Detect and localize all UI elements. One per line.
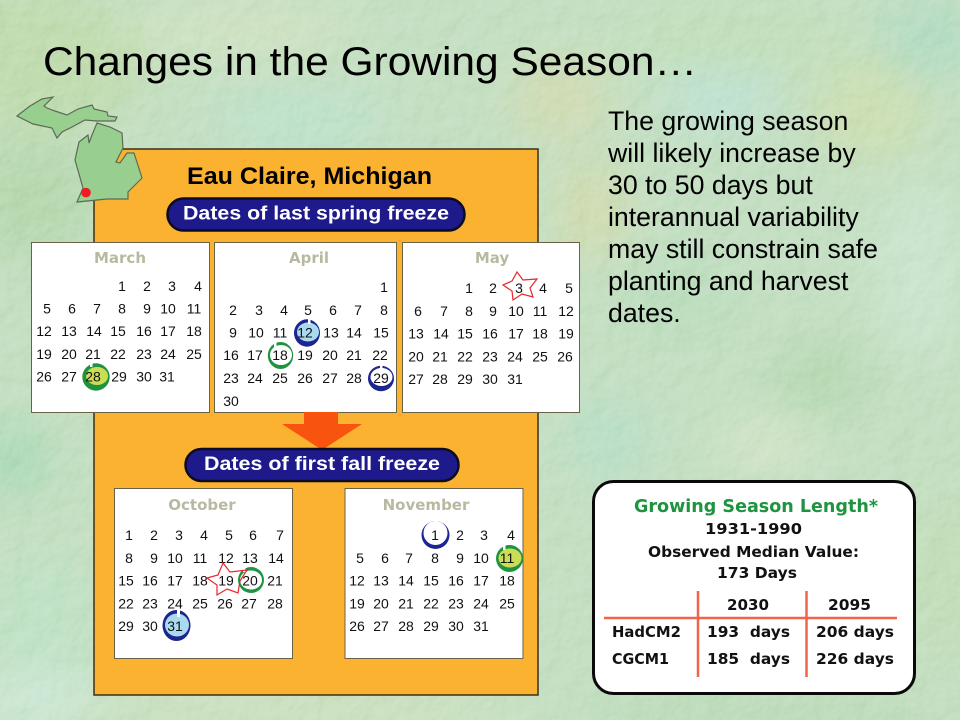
calendar: May: 24 <box>507 348 523 364</box>
calendar: November: 17 <box>473 572 489 588</box>
calendar: November: 15 <box>423 572 439 588</box>
calendar: November: 3 <box>480 527 488 543</box>
calendar: March: 12 <box>36 323 52 339</box>
calendar: November: 13 <box>373 572 389 588</box>
calendar: March: 11 <box>187 300 201 316</box>
table values: HadCM2 <box>612 623 681 641</box>
calendar: April: 28 <box>346 370 362 386</box>
text block: growing season summary: dates. <box>608 298 681 328</box>
calendar: October: 4 <box>200 527 208 543</box>
calendar: October: 12 <box>218 550 234 566</box>
calendar: October: 19 <box>218 572 234 588</box>
calendar: March: 4 <box>194 278 202 294</box>
calendar: October: 3 <box>175 527 183 543</box>
calendar: October: 18 <box>192 572 208 588</box>
calendar: October: 31 <box>167 618 183 634</box>
calendar: April: 24 <box>247 370 263 386</box>
calendar: October: 1 <box>125 527 133 543</box>
calendar: November: 16 <box>448 572 464 588</box>
text block: growing season summary: 30 to 50 days but <box>608 170 813 200</box>
calendar: October: 26 <box>217 596 233 612</box>
calendar: November: 1 <box>431 527 439 543</box>
label: dates of first fall freeze: Dates of first fall freeze <box>204 454 440 475</box>
calendar: October: 6 <box>249 527 257 543</box>
calendar: April: 3 <box>255 302 263 318</box>
calendar: May: 4 <box>539 280 547 296</box>
text block: growing season summary <box>607 106 878 328</box>
calendar: May: 19 <box>558 326 574 342</box>
calendar: April: 16 <box>223 347 239 363</box>
calendar: October: 22 <box>118 596 134 612</box>
calendar: November: 9 <box>456 550 464 566</box>
calendar: April: 4 <box>280 302 288 318</box>
calendar: March: 9 <box>143 300 151 316</box>
calendar: April: 19 <box>297 347 313 363</box>
calendar: March: 30 <box>136 368 152 384</box>
calendar: May: 15 <box>457 326 473 342</box>
calendar: April: 25 <box>272 370 288 386</box>
calendar: October: 24 <box>167 596 183 612</box>
calendar: October: 27 <box>241 596 257 612</box>
calendar: November: 19 <box>349 596 365 612</box>
calendar: March: 6 <box>68 300 76 316</box>
table values: 193 days <box>707 623 790 641</box>
calendar: November <box>345 488 523 658</box>
calendar: May: 27 <box>408 371 424 387</box>
calendar: March: 5 <box>43 300 51 316</box>
label: dates of last spring freeze: Dates of last spring freeze <box>183 204 449 224</box>
calendar: March: 20 <box>61 346 77 362</box>
calendar: October: 15 <box>118 572 134 588</box>
calendar: October: 17 <box>167 572 183 588</box>
calendar: April: 8 <box>380 302 388 318</box>
calendar: November: 31 <box>473 618 489 634</box>
calendar: November: 23 <box>448 596 464 612</box>
text block: growing season summary: will likely increase by <box>607 138 856 168</box>
calendar: April: 17 <box>247 347 263 363</box>
table values: CGCM1 <box>612 650 669 668</box>
calendar: October: 5 <box>225 527 233 543</box>
label: dates of last spring freeze <box>168 198 464 230</box>
calendar: March: 14 <box>86 323 102 339</box>
calendar: May: 10 <box>508 303 524 319</box>
calendar: April: 5 <box>304 302 312 318</box>
calendar: March: 13 <box>61 323 77 339</box>
table values: 226 days <box>816 650 894 668</box>
panel: growing season length table <box>594 482 914 694</box>
calendar: March: 18 <box>186 323 202 339</box>
calendar: April <box>214 242 396 412</box>
calendar: May: May <box>475 249 509 267</box>
text: observed median: 1931-1990 <box>705 520 802 538</box>
calendar: November: November <box>383 496 470 514</box>
calendar: March: March <box>94 249 146 267</box>
calendar: March: 10 <box>160 300 176 316</box>
text: observed median: Observed Median Value: <box>648 543 859 561</box>
calendar: May: 22 <box>457 348 473 364</box>
table values <box>612 596 894 668</box>
calendar: October: 7 <box>276 527 284 543</box>
calendar: November: 25 <box>499 596 515 612</box>
calendar: May: 12 <box>558 303 574 319</box>
calendar: May: 26 <box>557 348 573 364</box>
calendar: May: 17 <box>508 326 524 342</box>
calendar: November: 28 <box>398 618 414 634</box>
calendar: April: 10 <box>248 324 264 340</box>
calendar: April: 21 <box>346 347 362 363</box>
calendar: October: 21 <box>267 572 283 588</box>
calendar: April: 30 <box>223 393 239 409</box>
calendar: October: 2 <box>150 527 158 543</box>
calendar: May: 9 <box>489 303 497 319</box>
panel: orange calendar board <box>94 149 538 695</box>
calendar: November: 6 <box>381 550 389 566</box>
calendar: March: 1 <box>118 278 126 294</box>
calendar: October: 28 <box>267 596 283 612</box>
calendar: April: 6 <box>329 302 337 318</box>
calendar: October: 20 <box>242 572 258 588</box>
calendar: November: 24 <box>473 596 489 612</box>
calendar: March: 23 <box>136 346 152 362</box>
calendar: May: 11 <box>533 303 547 319</box>
calendar: November: 18 <box>499 572 515 588</box>
calendar: April: 20 <box>322 347 338 363</box>
calendar: November: 14 <box>398 572 414 588</box>
calendar: November: 26 <box>349 618 365 634</box>
calendar: May <box>402 242 580 412</box>
calendar: October: 11 <box>193 550 207 566</box>
calendar: November: 30 <box>448 618 464 634</box>
text block: growing season summary: interannual variability <box>608 202 859 232</box>
calendar: March: 17 <box>160 323 176 339</box>
calendar: March: 7 <box>93 300 101 316</box>
calendar: March: 31 <box>159 368 175 384</box>
label: dates of first fall freeze <box>186 449 458 481</box>
table values: 185 days <box>707 650 790 668</box>
calendar: March: 15 <box>110 323 126 339</box>
calendar: May: 8 <box>465 303 473 319</box>
calendar: October: 23 <box>142 596 158 612</box>
calendar: November: 4 <box>507 527 515 543</box>
calendar: October <box>114 488 292 658</box>
title: Changes in the Growing Season… <box>43 40 697 84</box>
calendar: May: 23 <box>482 348 498 364</box>
calendar: May: 25 <box>532 348 548 364</box>
calendar: March: 19 <box>36 346 52 362</box>
calendar: November: 5 <box>356 550 364 566</box>
calendar: May: 14 <box>433 326 449 342</box>
calendar: November: 11 <box>500 550 514 566</box>
text: observed median <box>648 520 859 582</box>
calendar: April: April <box>289 249 329 267</box>
calendar: November: 8 <box>431 550 439 566</box>
calendar: November: 20 <box>373 596 389 612</box>
calendar: March: 28 <box>85 368 101 384</box>
calendar: November: 29 <box>423 618 439 634</box>
calendar: November: 22 <box>423 596 439 612</box>
calendar: October: 29 <box>118 618 134 634</box>
calendar: March: 8 <box>118 300 126 316</box>
calendar: March: 25 <box>186 346 202 362</box>
calendar: May: 3 <box>515 280 523 296</box>
calendar: April: 2 <box>229 302 237 318</box>
table values: 2030 <box>727 596 769 614</box>
calendar: October: 30 <box>142 618 158 634</box>
calendar: November: 12 <box>349 572 365 588</box>
calendar: April: 14 <box>346 324 362 340</box>
calendar: November: 2 <box>456 527 464 543</box>
calendar: April: 15 <box>373 324 389 340</box>
calendar: October: 14 <box>268 550 284 566</box>
calendar: May: 31 <box>507 371 523 387</box>
calendar: April: 7 <box>354 302 362 318</box>
calendar: April: 13 <box>323 324 339 340</box>
calendar: May: 2 <box>489 280 497 296</box>
calendar: March: 21 <box>85 346 101 362</box>
calendar: May: 18 <box>532 326 548 342</box>
calendar: May: 30 <box>482 371 498 387</box>
calendar: November: 10 <box>473 550 489 566</box>
calendar: November: 27 <box>373 618 389 634</box>
calendar: April: 23 <box>223 370 239 386</box>
calendar: March: 16 <box>136 323 152 339</box>
calendar: April: 29 <box>373 370 389 386</box>
calendar: May: 13 <box>408 326 424 342</box>
calendar: November: 21 <box>398 596 414 612</box>
calendar: March: 27 <box>61 368 77 384</box>
calendar: March: 24 <box>160 346 176 362</box>
table values: 2095 <box>828 596 871 614</box>
calendar: March: 3 <box>168 278 176 294</box>
calendar: November: 7 <box>405 550 413 566</box>
calendar: April: 27 <box>322 370 338 386</box>
table grid lines <box>604 591 897 677</box>
calendar: May: 16 <box>482 326 498 342</box>
calendar: May: 20 <box>408 348 424 364</box>
calendar: April: 1 <box>380 279 388 295</box>
calendar: March: 26 <box>36 368 52 384</box>
calendar: April: 12 <box>297 324 313 340</box>
calendar: March: 2 <box>143 278 151 294</box>
calendar: March: 29 <box>111 368 127 384</box>
heading: growing season length: Growing Season Length* <box>634 497 878 517</box>
arrow: spring to fall <box>282 412 362 450</box>
text block: growing season summary: may still constrain safe <box>608 234 878 264</box>
calendar: October: October <box>168 496 236 514</box>
text: observed median: 173 Days <box>717 564 797 582</box>
calendar: October: 8 <box>125 550 133 566</box>
calendar: March <box>32 242 210 412</box>
calendar: April: 22 <box>372 347 388 363</box>
calendar: May: 5 <box>565 280 573 296</box>
heading: Eau Claire, Michigan: Eau Claire, Michigan <box>187 163 432 190</box>
calendar: April: 11 <box>273 324 287 340</box>
calendar: May: 1 <box>465 280 473 296</box>
calendar: May: 6 <box>414 303 422 319</box>
calendar: April: 26 <box>297 370 313 386</box>
text block: growing season summary: The growing season <box>608 106 848 136</box>
calendar: May: 29 <box>457 371 473 387</box>
calendar: October: 16 <box>142 572 158 588</box>
calendar: May: 28 <box>432 371 448 387</box>
table values: 206 days <box>816 623 894 641</box>
calendar: April: 18 <box>272 347 288 363</box>
calendar: October: 10 <box>167 550 183 566</box>
calendar: March: 22 <box>110 346 126 362</box>
calendar: October: 13 <box>242 550 258 566</box>
calendar: May: 7 <box>440 303 448 319</box>
calendar: October: 25 <box>192 596 208 612</box>
calendar: April: 9 <box>229 324 237 340</box>
icon: Michigan map with location dot <box>17 97 142 202</box>
text block: growing season summary: planting and harvest <box>608 266 849 296</box>
calendar: October: 9 <box>150 550 158 566</box>
calendar: May: 21 <box>432 348 448 364</box>
